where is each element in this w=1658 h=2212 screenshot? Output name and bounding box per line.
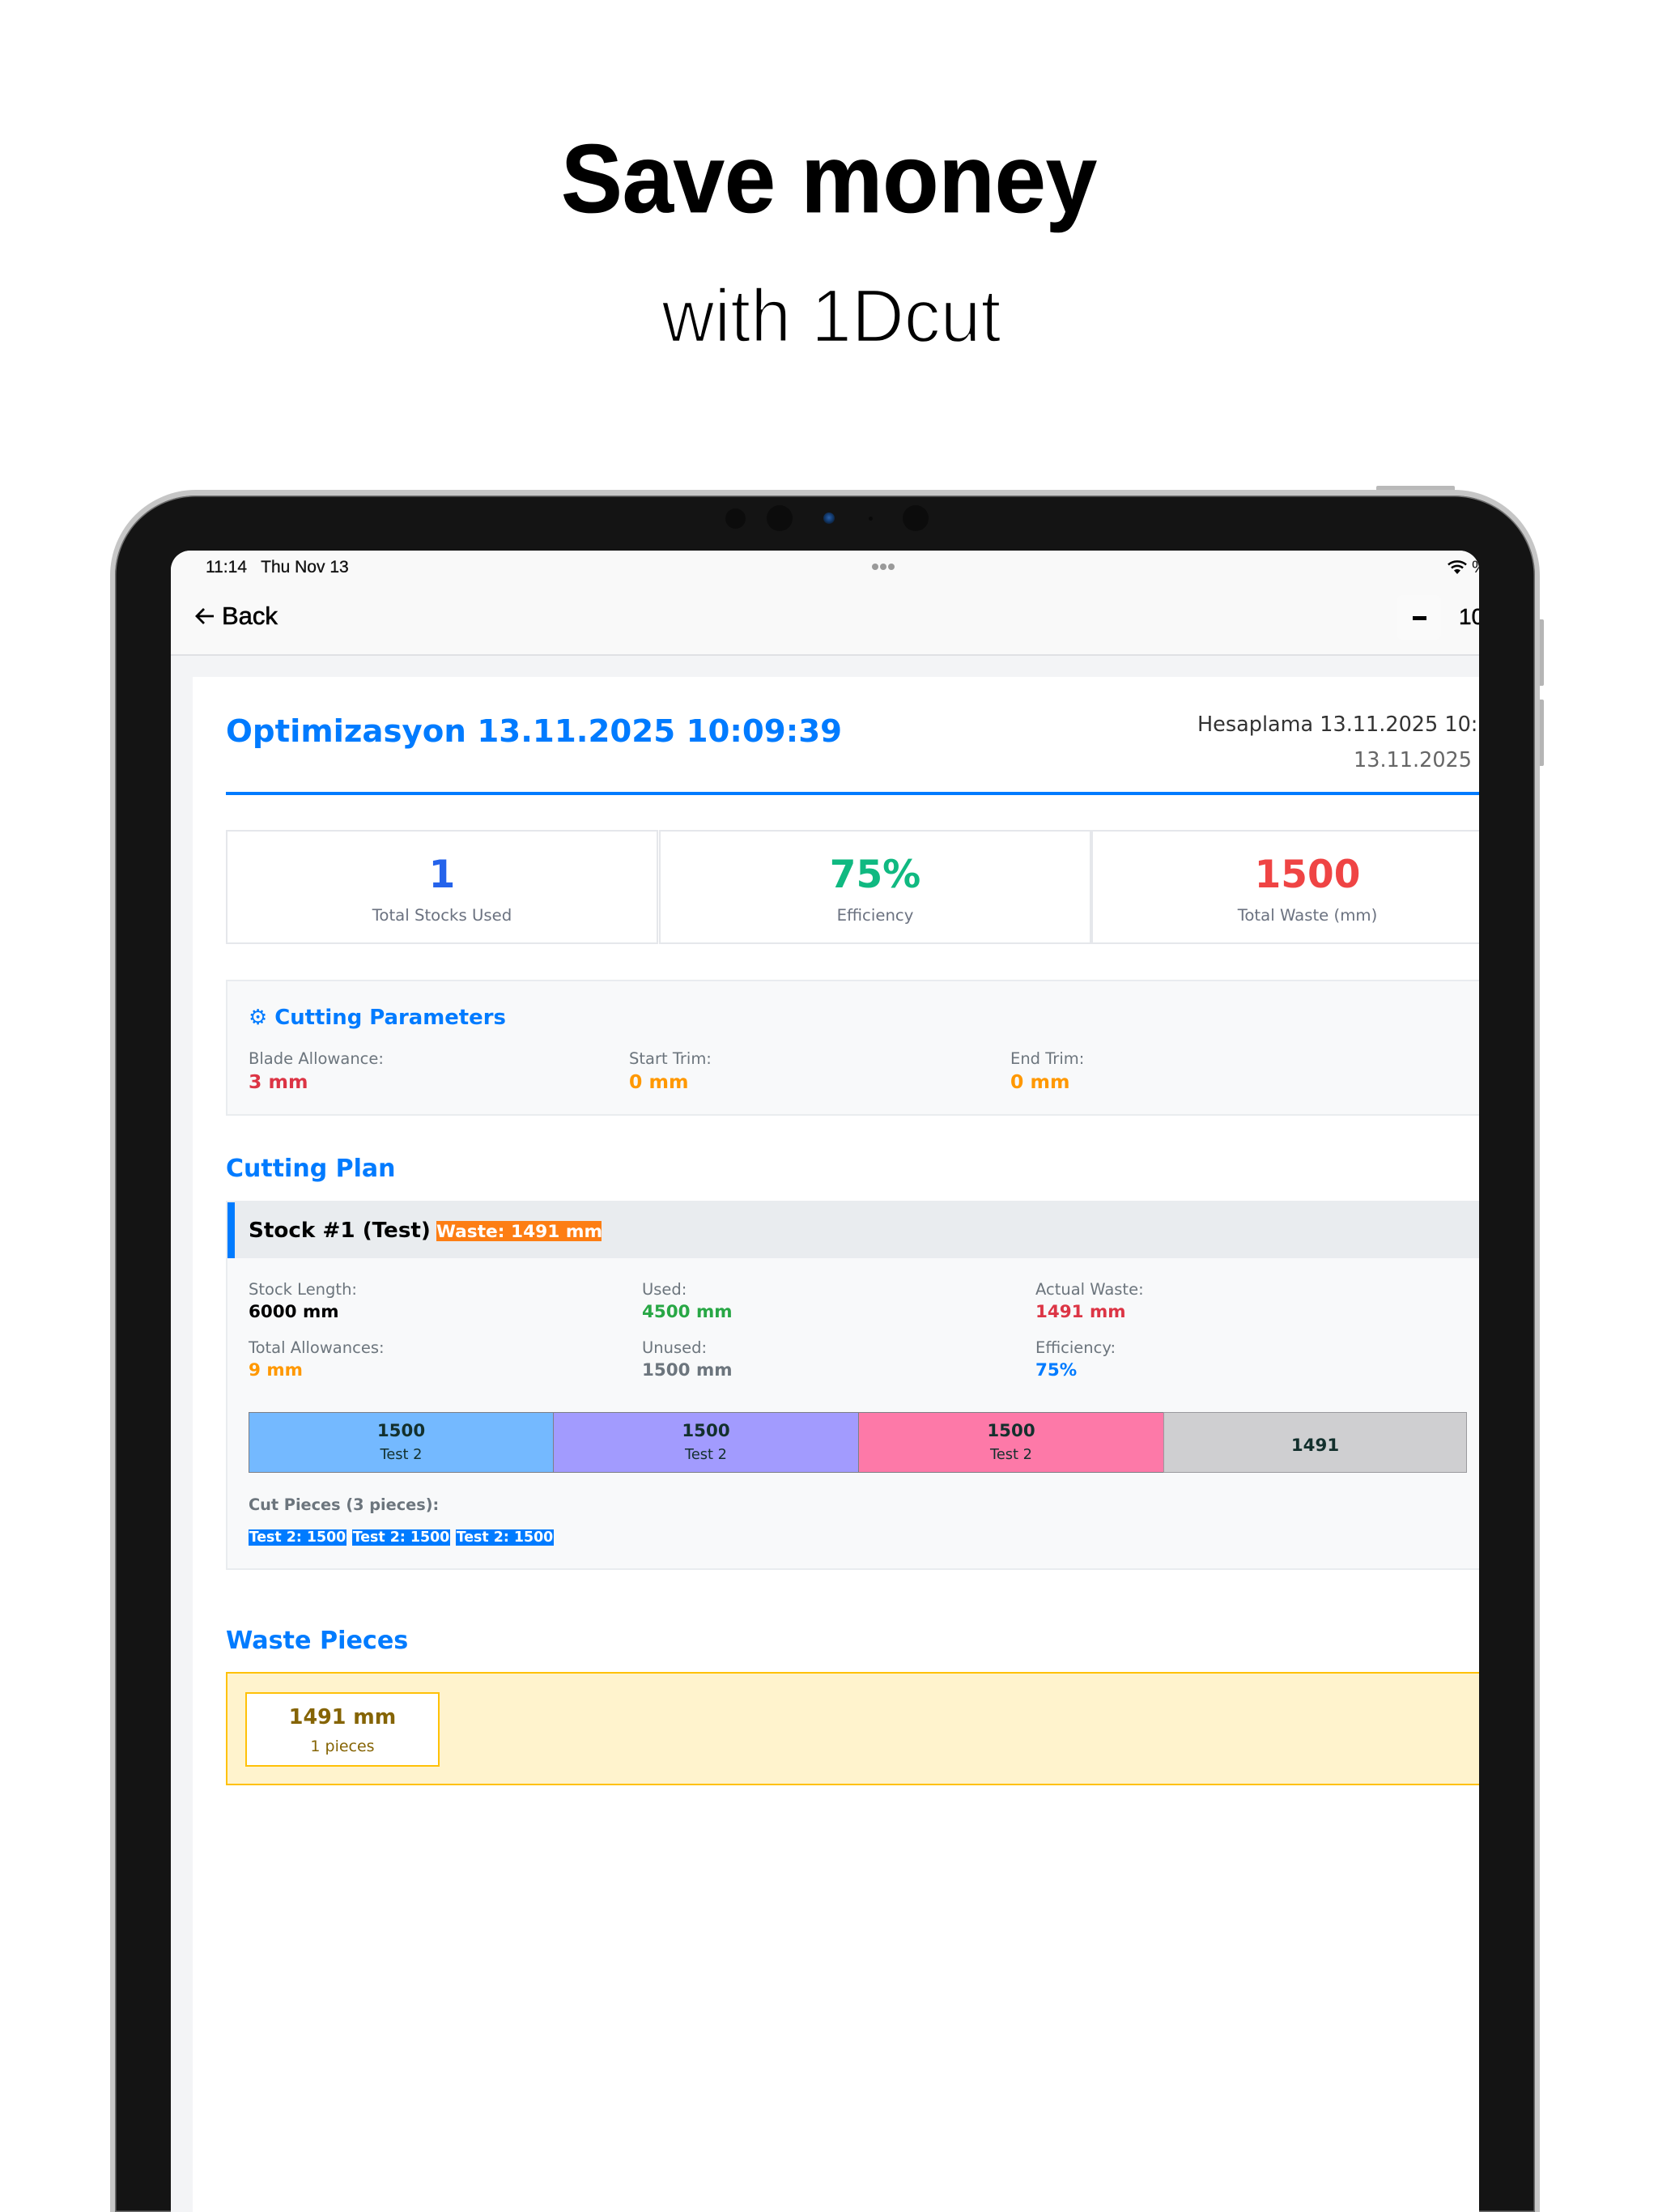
parameter: blade allowance: Blade Allowance: — [249, 1049, 384, 1068]
waste count: 1 pieces — [310, 1738, 375, 1755]
segment: piece 2: 1500 — [682, 1421, 730, 1441]
cutting bar chart — [249, 1412, 1467, 1473]
button: volume up — [1540, 619, 1544, 686]
stock metric: unused: Unused: — [642, 1338, 707, 1357]
stat label: Efficiency — [837, 906, 913, 925]
camera sensor dot — [868, 517, 873, 521]
stat: total waste — [1091, 830, 1524, 944]
stat value: 1 — [429, 853, 455, 897]
waste length: 1491 mm — [289, 1704, 396, 1729]
cut piece badges: Test 2: 1500 — [249, 1529, 346, 1546]
stat value: 1500 — [1255, 853, 1360, 897]
camera lens 2 — [767, 505, 793, 531]
parameter: start trim: Start Trim: — [629, 1049, 712, 1068]
segment: waste — [1163, 1412, 1467, 1473]
stock metric: total allowances: 9 mm — [249, 1360, 303, 1380]
stock name: Stock #1 (Test) — [249, 1218, 431, 1242]
heading rule — [226, 792, 1479, 795]
segment: piece 3 — [858, 1412, 1164, 1473]
stock metric: stock length: 6000 mm — [249, 1302, 339, 1321]
cut pieces heading: Cut Pieces (3 pieces): — [249, 1495, 439, 1514]
stock metric: unused — [642, 1338, 733, 1380]
stock metric: efficiency: 75% — [1035, 1360, 1077, 1380]
stat label: Total Stocks Used — [372, 906, 512, 925]
segment: piece 3: 1500 — [987, 1421, 1035, 1441]
parameter: blade allowance — [249, 1049, 384, 1093]
panel: stock card — [226, 1201, 1479, 1570]
stock header — [227, 1202, 1479, 1258]
segment: piece 1 — [249, 1412, 554, 1473]
segment: piece 2 — [553, 1412, 859, 1473]
report sheet — [193, 677, 1479, 2212]
zoom out button — [1397, 595, 1441, 640]
stock metric: efficiency — [1035, 1338, 1116, 1380]
parameter: end trim: End Trim: — [1010, 1049, 1084, 1068]
parameter: blade allowance: 3 mm — [249, 1070, 308, 1093]
segment: piece 1: 1500 — [377, 1421, 425, 1441]
subtitle: with 1Dcut — [662, 274, 1001, 358]
back label: Back — [222, 602, 278, 630]
stock metric: actual waste — [1035, 1280, 1144, 1321]
status bar dots — [872, 564, 895, 570]
stock metric: used: Used: — [642, 1280, 687, 1299]
cut piece badges: Test 2: 1500 — [353, 1529, 449, 1546]
segment: piece 1: Test 2 — [380, 1446, 422, 1463]
segment: piece 3: Test 2 — [990, 1446, 1032, 1463]
stock metric: actual waste: 1491 mm — [1035, 1302, 1126, 1321]
parameter: start trim — [629, 1049, 712, 1093]
stock metric: unused: 1500 mm — [642, 1360, 733, 1380]
cut piece badges: Test 2: 1500 — [457, 1529, 553, 1546]
segment: piece 2: Test 2 — [685, 1446, 727, 1463]
button: volume down — [1540, 700, 1544, 766]
button: top — [1376, 486, 1455, 492]
stock metric: total allowances: Total Allowances: — [249, 1338, 385, 1357]
device buttons — [1376, 486, 1544, 766]
stock metric: stock length: Stock Length: — [249, 1280, 357, 1299]
tablet frame — [110, 490, 1540, 2212]
calculation date: 13.11.2025 — [1354, 748, 1472, 772]
icon: minus — [1413, 616, 1426, 620]
parameter: end trim — [1010, 1049, 1084, 1093]
camera lens 1 — [725, 508, 745, 529]
tablet screen — [171, 551, 1479, 2212]
parameter: start trim: 0 mm — [629, 1070, 689, 1093]
stock metric: used — [642, 1280, 733, 1321]
stock metric: actual waste: Actual Waste: — [1035, 1280, 1144, 1299]
icon: wifi — [1448, 560, 1467, 574]
section heading: cutting plan: Cutting Plan — [226, 1155, 395, 1182]
camera lens blue — [823, 513, 835, 524]
cut piece badges — [249, 1529, 554, 1546]
stat value: 75% — [830, 853, 920, 897]
navigation bar — [171, 551, 1479, 656]
parameter: end trim: 0 mm — [1010, 1070, 1070, 1093]
camera array — [730, 505, 929, 530]
stat: efficiency — [659, 830, 1091, 944]
icon: back arrow — [195, 608, 214, 624]
panel heading: ⚙ Cutting Parameters — [249, 1006, 506, 1030]
section heading: waste pieces: Waste Pieces — [226, 1626, 408, 1655]
report heading: Optimizasyon 13.11.2025 10:09:39 — [226, 713, 842, 750]
waste piece card — [245, 1692, 440, 1767]
stat label: Total Waste (mm) — [1238, 906, 1377, 925]
stock metric: used: 4500 mm — [642, 1302, 733, 1321]
stock metric: total allowances — [248, 1338, 385, 1380]
panel: cutting parameters — [226, 980, 1479, 1116]
segment: waste: 1491 — [1291, 1436, 1339, 1456]
panel: waste pieces — [226, 1672, 1479, 1785]
stat: total stocks used — [226, 830, 658, 944]
camera lens 3 — [903, 505, 929, 531]
stock metric: efficiency: Efficiency: — [1035, 1338, 1116, 1357]
title: Save money — [561, 125, 1097, 233]
stock metric: stock length — [249, 1280, 357, 1321]
status bar time: 11:14 Thu Nov 13 — [206, 558, 349, 576]
